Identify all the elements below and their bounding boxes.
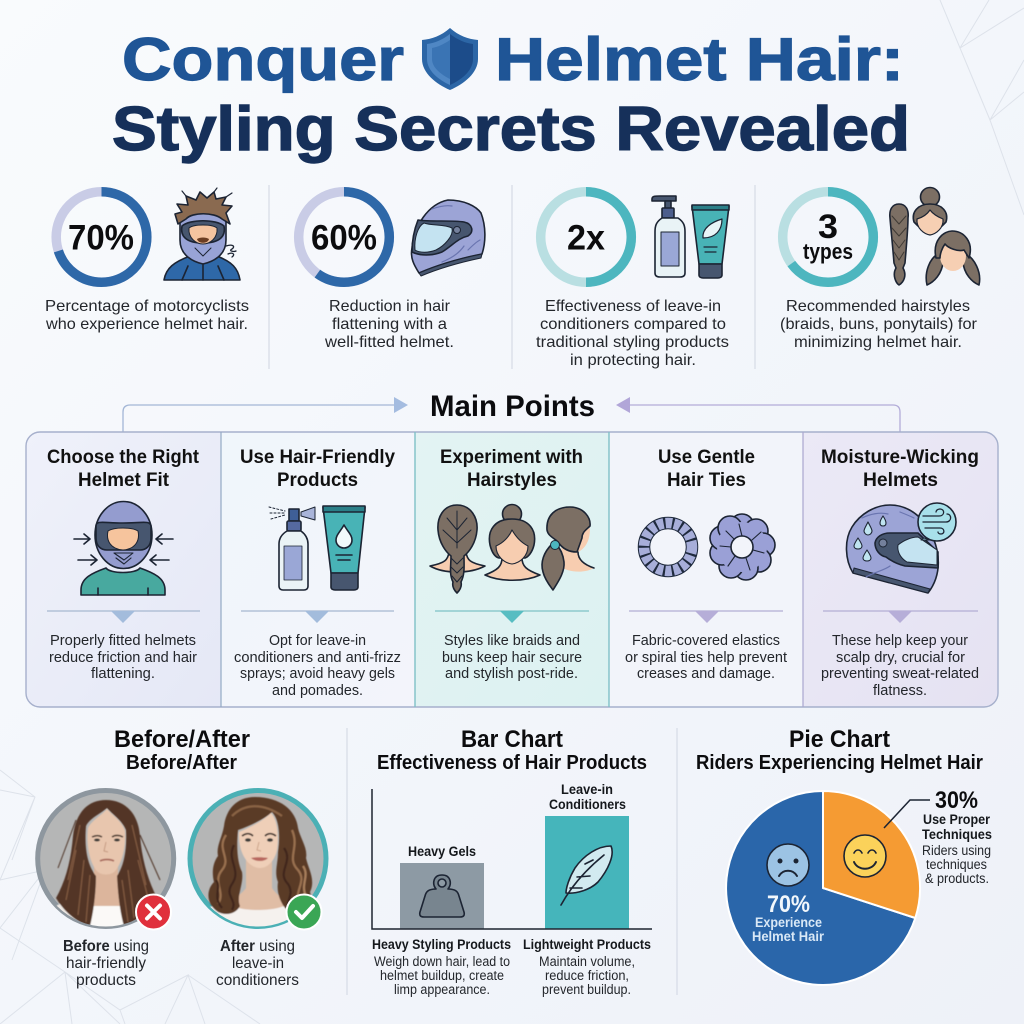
caption: 2x: Effectiveness of leave-in [545,298,721,315]
column: moisture-wicking helmets [821,446,979,699]
icon: sad face [767,844,809,886]
heading: Helmets [863,469,938,491]
body text: conditioners and anti-frizz [234,650,401,666]
title line 1: Conquer: Conquer [122,26,404,93]
heading: Helmet Fit [78,469,169,491]
stat: 3 types [780,188,980,351]
body text [49,633,197,682]
icon: three hairstyles [890,188,980,285]
body text: flatness. [873,683,927,699]
bar: heavy gels: Heavy Gels [408,844,476,859]
caption: 3 types: (braids, buns, ponytails) for [780,316,978,333]
bar: leave-in conditioners: Leave-in [561,782,613,797]
heading: Effectiveness of Hair Products [377,752,647,774]
divider marker [823,611,978,623]
callout: 30 percent: Riders using [922,843,991,858]
bun head [485,504,540,580]
caption: after: conditioners [216,972,299,989]
caption: 2x: traditional styling products [536,334,729,351]
bar: heavy gels [400,844,484,929]
main points heading with connector arrows [123,390,900,432]
divider marker [241,611,394,623]
caption: 60 percent [324,298,454,351]
caption: 3 types: minimizing helmet hair. [794,334,962,351]
heading [440,446,583,491]
donut: 70%: 70% [68,218,134,258]
title line 2: Styling Secrets Revealed [112,95,910,164]
heading: Pie Chart [789,726,890,753]
stat: 60 percent [299,192,485,351]
donut: 60%: 60% [311,218,377,258]
icon: shield [422,28,478,90]
icon: spray and tube [269,506,365,590]
heading: Main Points: Main Points [430,390,595,423]
icon: feather [561,846,612,905]
label: lightweight products: Maintain volume, [539,954,635,969]
column: gentle hair ties [625,446,787,682]
heading [240,446,395,491]
pie slice: 70 percent: Experience [755,914,822,930]
portrait: after [190,790,326,932]
heading: Experiment with [440,446,583,468]
body text: Properly fitted helmets [50,633,196,649]
bar: leave-in conditioners [545,782,629,929]
body text: These help keep your [832,633,968,649]
label: heavy styling products: limp appearance. [394,982,490,997]
label: heavy styling products: Weigh down hair, lead to [374,954,510,969]
body text: scalp dry, crucial for [836,650,965,666]
arrow: right connector [616,397,900,432]
caption: 60 percent: Reduction in hair [329,298,451,315]
caption: 70 percent [45,298,249,333]
stat: 70 percent [45,188,249,333]
heading [696,726,983,774]
stat: 2x [536,192,729,369]
section: pie chart [696,726,992,985]
panel: main points [26,432,998,707]
icon: helmet fit [74,502,173,595]
icon: moisture-wicking helmet [846,503,956,593]
donut: 70% [56,192,147,282]
caption: 60 percent: flattening with a [332,316,447,333]
donut: 2x [541,192,631,282]
icon: pump bottle and tube [652,196,729,278]
caption: 3 types: Recommended hairstyles [786,298,970,315]
callout: 30 percent: & products. [925,871,989,886]
label: lightweight products [523,937,651,997]
label: lightweight products: prevent buildup. [542,982,631,997]
caption: after: leave-in [232,955,284,972]
heading: Products [277,469,358,491]
icon: happy face [844,835,886,877]
caption: before: hair-friendly [66,955,146,972]
caption: 70 percent: who experience helmet hair. [45,316,248,333]
body text: Fabric-covered elastics [632,633,780,649]
body text: buns keep hair secure [442,650,582,666]
body text [625,633,787,682]
pie slice: 70 percent: Helmet Hair [752,928,825,944]
body text [442,633,582,682]
body text: and stylish post-ride. [445,666,578,682]
column: right helmet fit [47,446,200,682]
icon: scrunchie [710,514,775,580]
section: bar chart [372,726,652,997]
body text [234,633,401,699]
heading [821,446,979,491]
donut: 2x: 2x [567,218,606,258]
heading: Hairstyles [467,469,557,491]
caption: after: After using [220,938,295,955]
badge: cross [136,894,171,930]
caption: 2x: in protecting hair. [570,352,696,369]
label: heavy styling products [372,937,511,997]
column: experiment with hairstyles [430,446,594,682]
body text [821,633,979,699]
caption: after [216,938,299,989]
callout: 30 percent: Techniques [922,827,992,842]
heading [114,726,250,774]
donut: 60% [299,192,389,282]
label: heavy styling products: helmet buildup, create [380,968,504,983]
icon: weight [420,875,464,917]
heading: Use Gentle [658,446,755,468]
callout: 30 percent [884,787,992,886]
arrow: left connector [123,397,408,432]
icon: helmet [411,200,485,276]
braid head [430,505,485,593]
heading [47,446,199,491]
section: before and after [38,726,326,989]
callout: 30 percent: 30% [935,787,978,814]
heading [658,446,755,491]
body text: or spiral ties help prevent [625,650,787,666]
body text: sprays; avoid heavy gels [240,666,395,682]
icon: rider with messy hair [164,188,240,280]
divider marker [47,611,200,623]
heading: Riders Experiencing Helmet Hair [696,752,983,774]
heading: Before/After [126,752,237,774]
body text: flattening. [91,666,155,682]
caption: before [63,938,149,989]
column: hair-friendly products [234,446,401,699]
callout: 30 percent: Use Proper [923,812,991,827]
caption: 2x: conditioners compared to [540,316,726,333]
ponytail head [542,507,594,590]
body text: creases and damage. [637,666,775,682]
caption: 70 percent: Percentage of motorcyclists [45,298,249,315]
body text: reduce friction and hair [49,650,197,666]
label: lightweight products: Lightweight Products [523,937,651,952]
body text: and pomades. [272,683,363,699]
badge: check [286,894,322,930]
pie slice: 70 percent [726,791,915,985]
title [112,26,910,164]
heading: Before/After [114,726,250,753]
caption: 3 types [780,298,978,351]
divider marker [435,611,589,623]
portrait: before [38,790,174,932]
heading: Choose the Right [47,446,199,468]
heading: Use Hair-Friendly [240,446,395,468]
body text: Styles like braids and [444,633,580,649]
heading: Moisture-Wicking [821,446,979,468]
donut: 3 types: types [803,239,853,264]
label: heavy styling products: Heavy Styling Products [372,937,511,952]
bar: leave-in conditioners: Conditioners [549,797,626,812]
title line 1: Helmet Hair: Helmet Hair: [495,26,904,93]
icon: three hairstyles [430,504,594,593]
icon: spiral tie [644,523,692,571]
body text: Opt for leave-in [269,633,366,649]
heading [377,726,647,774]
heading: Bar Chart [461,726,563,753]
donut: 3 types [783,192,873,282]
heading: Hair Ties [667,469,746,491]
donut: 3 types: 3 [818,208,838,246]
pie slice: 30 percent [823,791,920,918]
caption: before: products [76,972,136,989]
divider marker [629,611,783,623]
caption: 2x [536,298,729,369]
label: lightweight products: reduce friction, [545,968,629,983]
chart axes [372,789,652,929]
pie slice: 70 percent: 70% [767,891,810,918]
caption: before: Before using [63,938,149,955]
callout: 30 percent: techniques [926,857,987,872]
caption: 60 percent: well-fitted helmet. [324,334,454,351]
body text: preventing sweat-related [821,666,979,682]
